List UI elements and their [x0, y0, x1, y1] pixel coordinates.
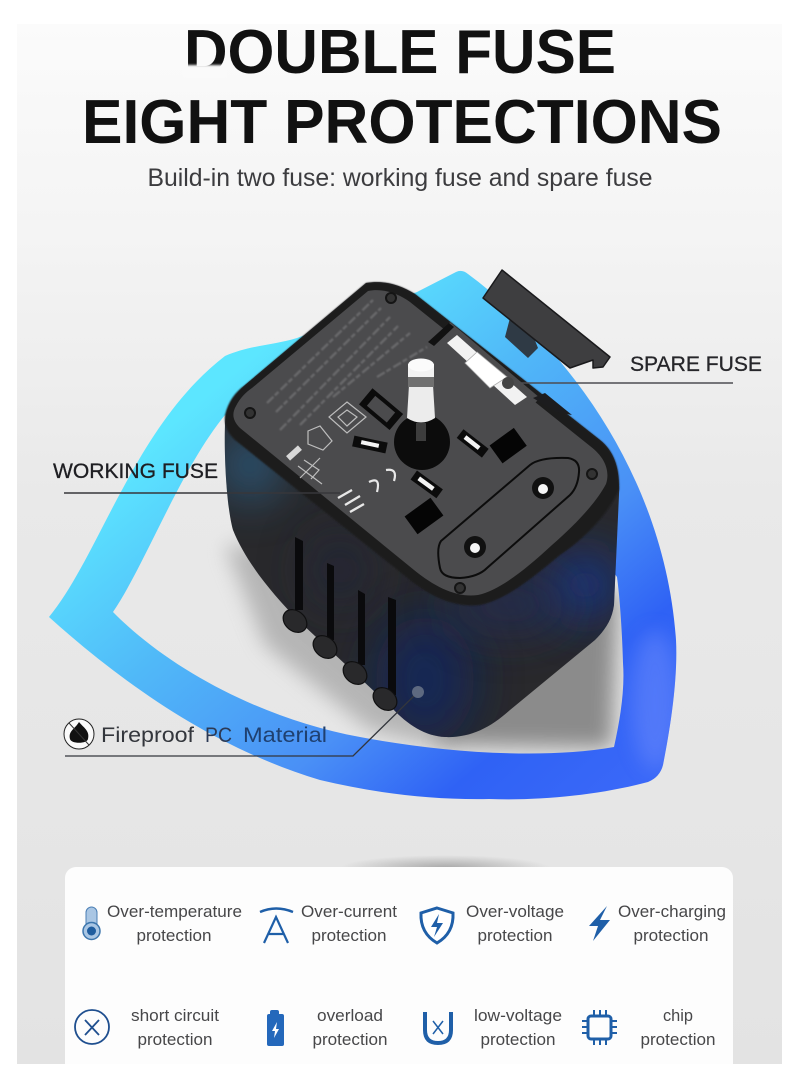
callout: fireproof PC material: Fireproof: [101, 724, 194, 747]
front face rim: [225, 282, 619, 605]
label: over-charging: protection: [634, 926, 708, 945]
title: [82, 18, 722, 157]
title: DOUBLE FUSE: [184, 18, 616, 87]
shadow beneath adapter, left: [225, 545, 450, 750]
label: low-voltage: protection: [480, 1030, 556, 1049]
label: short circuit: short circuit: [131, 1006, 219, 1025]
UK/US socket centre hole: [394, 414, 450, 470]
label: over-temperature: protection: [136, 926, 212, 945]
retractable pin: [407, 358, 435, 441]
subtitle: Build-in two fuse: working fuse and spare fuse: [148, 164, 652, 192]
screws: [245, 293, 597, 593]
callout: spare fuse: SPARE FUSE: [630, 353, 762, 376]
socket holes: [352, 388, 527, 534]
callout: fireproof PC material: Material: [243, 724, 327, 747]
label: over-current: Over-current: [301, 902, 397, 921]
icon: chip: [582, 1010, 617, 1045]
label: over-temperature: Over-temperature: [107, 902, 242, 921]
prong knobs: [279, 605, 401, 715]
label: over-current: protection: [312, 926, 386, 945]
label: over-voltage: Over-voltage: [466, 902, 564, 921]
adapter device: [215, 270, 630, 745]
plate opening edge: [444, 322, 540, 406]
front face plate: [233, 290, 607, 596]
icon: thermometer: [83, 907, 100, 940]
regulatory small print: [267, 300, 427, 430]
label: low-voltage: low-voltage: [474, 1006, 562, 1025]
prong slots: [295, 537, 396, 695]
adapter body: [215, 275, 630, 745]
blue shield outline: [49, 271, 676, 799]
icon: battery: [267, 1010, 284, 1046]
shadow beneath adapter, right: [440, 590, 618, 748]
callout: working fuse: WORKING FUSE: [53, 460, 218, 483]
title: EIGHT PROTECTIONS: [82, 88, 722, 157]
panel: protections card: [0, 867, 800, 1091]
label: chip: protection: [640, 1030, 716, 1049]
icon: ampere: [260, 908, 293, 943]
soft shadow above card: [340, 855, 550, 881]
shield lighter right tip: [631, 630, 679, 770]
icon: shield bolt: [421, 908, 453, 943]
label: over-voltage: protection: [478, 926, 552, 945]
certification marks: [286, 402, 395, 512]
icon: no fire: [64, 719, 94, 749]
label: short circuit: protection: [138, 1030, 212, 1049]
icon: short circuit: [75, 1010, 109, 1044]
label: over-charging: Over-charging: [618, 902, 726, 921]
callout: fireproof PC material: [64, 686, 424, 756]
EU socket outline: [438, 458, 579, 578]
label: overload: overload: [317, 1006, 383, 1025]
fuse compartment: [428, 323, 572, 415]
label: overload: protection: [312, 1030, 388, 1049]
removed fuse cover: [483, 270, 610, 368]
icon: low voltage: [425, 1012, 451, 1043]
icon: lightning: [589, 906, 610, 941]
label: chip: chip: [663, 1006, 693, 1025]
callout: fireproof PC material: PC: [205, 724, 232, 747]
